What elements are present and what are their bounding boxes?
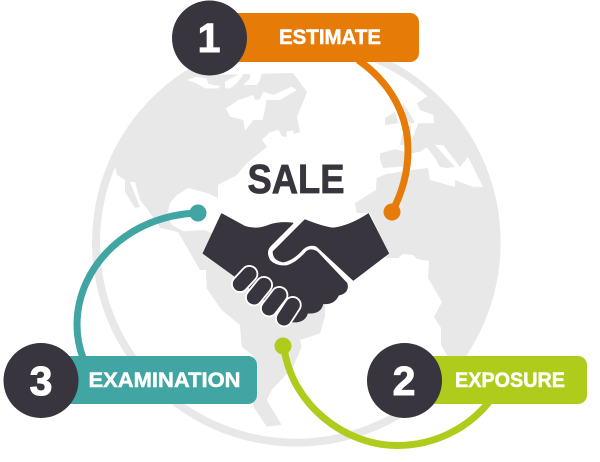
- connector: examination: [77, 204, 206, 358]
- label: estimate: ESTIMATE: [279, 26, 381, 49]
- icon: handshake: [203, 214, 388, 322]
- label: examination: EXAMINATION: [88, 369, 240, 392]
- connector: estimate: [358, 60, 408, 220]
- connector: exposure: [274, 338, 489, 446]
- globe background: [92, 62, 500, 446]
- label: exposure: EXPOSURE: [455, 369, 565, 392]
- badge: 2: [367, 343, 442, 418]
- badge: 3: 3: [30, 358, 52, 404]
- badge: 2: 2: [393, 358, 415, 404]
- badge: 1: [172, 0, 247, 76]
- label: exposure: [425, 356, 587, 404]
- badge: 1: 1: [198, 15, 220, 61]
- heading: sale: SALE: [248, 156, 344, 202]
- label: examination: [60, 356, 257, 404]
- label: estimate: [225, 13, 419, 62]
- badge: 3: [4, 343, 78, 418]
